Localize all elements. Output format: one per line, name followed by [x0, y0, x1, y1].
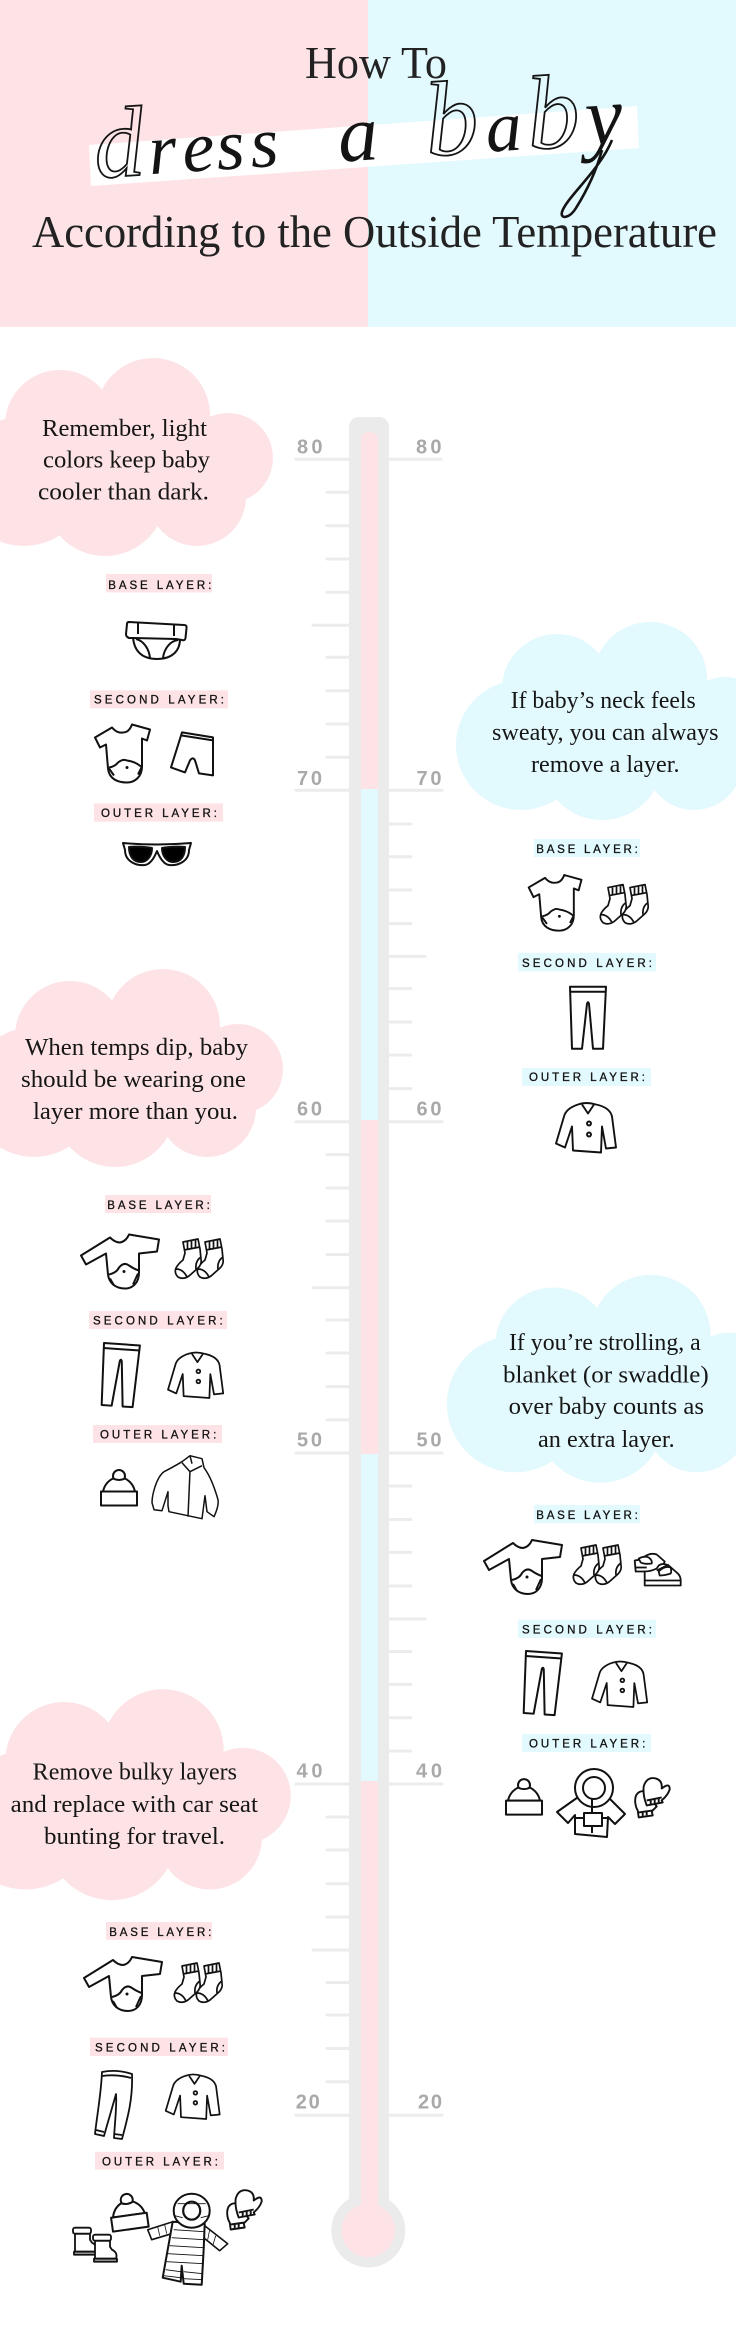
icon: cardigan — [592, 1661, 647, 1707]
label: base layer — [106, 1922, 212, 1940]
thermometer — [296, 417, 442, 2268]
scale numbers: 60 — [297, 1098, 322, 1120]
icon: cardigan — [166, 2074, 220, 2119]
label: outer layer: OUTER LAYER: — [102, 2156, 218, 2168]
icon: leggings — [100, 1343, 140, 1407]
icon: long sleeve onesie — [81, 1234, 159, 1288]
icon: socks — [174, 1963, 222, 2002]
label: base layer — [534, 839, 640, 857]
tip text — [38, 416, 210, 506]
label: outer layer — [522, 1734, 651, 1752]
title: dress a baby: d — [90, 86, 148, 200]
scale numbers: 50 — [297, 1430, 322, 1452]
label: second layer — [90, 690, 228, 708]
title: dress a baby: a — [335, 88, 401, 180]
tip text: and replace with car seat — [11, 1792, 258, 1818]
pink fill 60 to 50 — [361, 1120, 378, 1454]
label: base layer: BASE LAYER: — [109, 1927, 211, 1939]
scale numbers: 80 — [297, 437, 322, 459]
label: second layer: SECOND LAYER: — [522, 1624, 652, 1636]
panel: 20 to 40 degrees — [0, 1689, 291, 2285]
scale numbers: 50 — [416, 1430, 442, 1452]
cloud: temps dip tip — [0, 969, 283, 1167]
tip text: When temps dip, baby — [25, 1035, 248, 1061]
title: How To: How To — [305, 37, 447, 88]
title: dress a baby: e — [180, 106, 217, 188]
pink fill 80 to 70 — [361, 432, 378, 789]
tip text: should be wearing one — [21, 1067, 246, 1093]
icon: boots — [73, 2228, 117, 2262]
label: outer layer: OUTER LAYER: — [101, 808, 217, 820]
tip text: blanket (or swaddle) — [503, 1362, 709, 1388]
white highlight band — [89, 106, 639, 186]
label: second layer: SECOND LAYER: — [95, 2042, 225, 2054]
title: dress a baby: r — [146, 109, 180, 190]
label: base layer: BASE LAYER: — [536, 1510, 638, 1522]
tip text: layer more than you. — [33, 1099, 238, 1125]
icon: socks — [600, 885, 648, 924]
scale numbers: 40 — [296, 1760, 322, 1782]
label: second layer — [518, 1620, 656, 1638]
blue background half — [368, 0, 736, 327]
scale numbers: 60 — [416, 1098, 442, 1120]
label: second layer — [89, 1311, 227, 1329]
icon: hooded parka — [557, 1769, 625, 1837]
label: outer layer — [94, 803, 223, 822]
tip text: If baby’s neck feels — [511, 688, 696, 714]
icon: shorts — [171, 732, 213, 775]
icon: zip jacket — [152, 1456, 218, 1519]
cloud: sweaty neck tip — [456, 622, 736, 820]
tip text: bunting for travel. — [44, 1824, 225, 1850]
label: second layer: SECOND LAYER: — [93, 1315, 223, 1327]
label: base layer: BASE LAYER: — [536, 844, 638, 856]
icon: shoes — [635, 1554, 681, 1586]
icon: cardigan — [556, 1103, 616, 1152]
pink fill 40 to 20 — [361, 1781, 378, 2211]
label: second layer: SECOND LAYER: — [94, 695, 224, 707]
icon: hat — [108, 2191, 149, 2232]
tip text: colors keep baby — [43, 448, 210, 474]
bulb fill — [342, 2204, 395, 2257]
scale numbers: 20 — [418, 2092, 442, 2114]
label: second layer: SECOND LAYER: — [522, 958, 652, 970]
label: outer layer — [522, 1068, 651, 1086]
label: base layer — [105, 1195, 211, 1213]
icon: long sleeve onesie — [84, 1957, 162, 2011]
label: second layer — [90, 2038, 228, 2056]
icon: leggings — [522, 1651, 562, 1715]
label: outer layer — [95, 2152, 224, 2170]
icon: leggings — [570, 987, 606, 1049]
pink background half — [0, 0, 368, 327]
tip text: Remove bulky layers — [33, 1760, 237, 1786]
icon: snowsuit — [148, 2194, 228, 2285]
panel: 50 to 60 degrees — [0, 969, 283, 1519]
cloud: bulky layers tip — [0, 1689, 291, 1900]
icon: socks — [175, 1239, 223, 1278]
title: dress a baby: a — [483, 86, 524, 168]
scale numbers: 70 — [416, 768, 442, 790]
panel: 70 to 80 degrees — [0, 358, 273, 865]
title: dress a baby: s — [247, 101, 299, 183]
label: outer layer: OUTER LAYER: — [100, 1429, 216, 1441]
title: dress a baby — [90, 49, 626, 217]
label: base layer: BASE LAYER: — [108, 580, 211, 592]
scale numbers: 20 — [296, 2092, 320, 2114]
panel: 40 to 50 degrees — [447, 1275, 736, 1837]
label: base layer — [534, 1505, 640, 1523]
scale numbers: 40 — [416, 1760, 442, 1782]
title: dress a baby: y — [574, 69, 626, 165]
scale numbers — [296, 437, 442, 2114]
label: base layer: BASE LAYER: — [107, 1200, 210, 1212]
icon: mittens — [635, 1778, 670, 1817]
title: dress a baby: b — [421, 59, 482, 179]
icon: hat — [101, 1470, 137, 1506]
title: dress a baby: s — [213, 104, 247, 186]
tip text — [503, 1330, 709, 1453]
scale numbers: 70 — [297, 768, 322, 790]
label: outer layer — [93, 1425, 222, 1443]
icon: short sleeve onesie — [529, 875, 582, 931]
label: base layer — [106, 574, 212, 592]
scale ticks — [296, 459, 442, 2115]
tip text: an extra layer. — [538, 1427, 675, 1453]
icon: mittens — [227, 2190, 262, 2230]
tip text — [492, 688, 718, 778]
tip text — [21, 1035, 248, 1125]
header — [0, 0, 736, 327]
icon: long sleeve onesie — [484, 1540, 562, 1594]
icon: hat — [506, 1779, 542, 1815]
label: outer layer: OUTER LAYER: — [529, 1072, 645, 1084]
scale numbers: 80 — [416, 437, 442, 459]
cloud: strolling tip — [447, 1275, 736, 1483]
tip text: If you’re strolling, a — [509, 1330, 701, 1356]
cloud: light colors tip — [0, 358, 273, 556]
blue fill 50 to 40 — [361, 1454, 378, 1781]
title: dress a baby: b — [523, 52, 583, 172]
icon: diaper — [126, 622, 187, 659]
title: According to the Outside Temperature: According to the Outside Temperature — [32, 207, 717, 257]
icon: sunglasses — [123, 843, 191, 865]
label: second layer — [518, 953, 656, 971]
panel: 60 to 70 degrees — [456, 622, 736, 1152]
icon: cardigan — [168, 1352, 223, 1398]
tip text — [11, 1760, 258, 1850]
icon: pants — [95, 2071, 132, 2139]
icon: socks — [573, 1545, 621, 1584]
icon: short sleeve onesie — [95, 724, 150, 782]
tip text: over baby counts as — [509, 1394, 704, 1420]
tip text: cooler than dark. — [38, 480, 209, 506]
blue fill 70 to 60 — [361, 789, 378, 1120]
thermometer tube outline — [349, 417, 389, 2227]
thermometer bulb outline — [331, 2194, 405, 2268]
tip text: sweaty, you can always — [492, 720, 718, 746]
tip text: Remember, light — [42, 416, 207, 442]
label: outer layer: OUTER LAYER: — [529, 1738, 645, 1750]
tip text: remove a layer. — [531, 752, 680, 778]
